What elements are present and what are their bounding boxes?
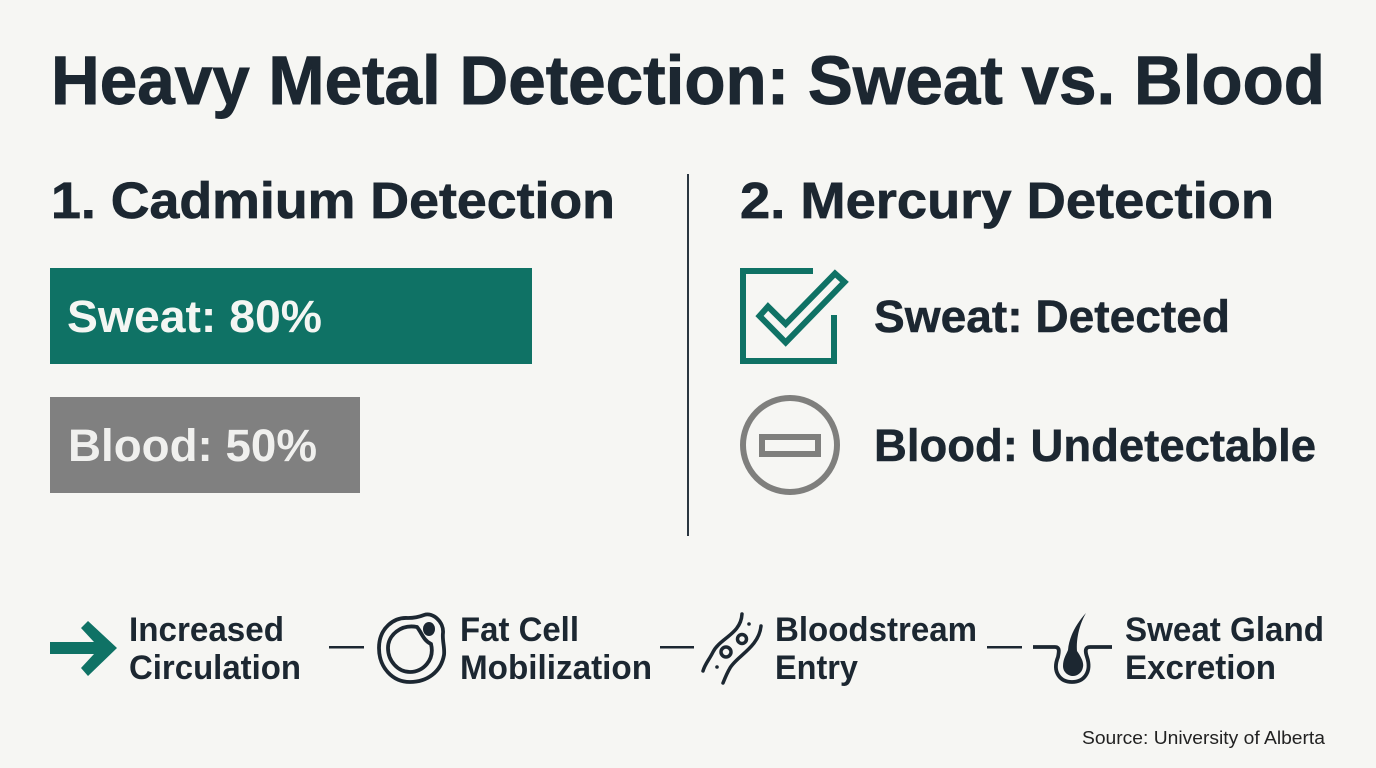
- icon: checkmark in box: [743, 271, 844, 361]
- step label: bloodstream entry: Entry: [775, 649, 858, 687]
- step label: sweat gland excretion: Excretion: [1125, 649, 1276, 687]
- label: sweat detected: Sweat: Detected: [874, 291, 1230, 342]
- title: Heavy Metal Detection: Sweat vs. Blood: [51, 42, 1325, 119]
- bar: blood 50%: [50, 397, 360, 493]
- step label: increased circulation: [129, 611, 301, 687]
- step label: bloodstream entry: Bloodstream: [775, 611, 977, 649]
- panel: mercury detection: [740, 172, 1316, 492]
- icon: minus circle: [743, 398, 837, 492]
- label: blood undetectable: Blood: Undetectable: [874, 420, 1316, 471]
- bar: sweat 80%: Sweat: 80%: [67, 291, 322, 342]
- step label: fat cell mobilization: [460, 611, 652, 687]
- icon: sweat gland: [1033, 613, 1112, 682]
- icon: green arrow: [50, 621, 117, 676]
- step label: sweat gland excretion: [1125, 611, 1324, 687]
- heading: mercury: 2. Mercury Detection: [740, 172, 1274, 229]
- step label: fat cell mobilization: Fat Cell: [460, 611, 579, 649]
- step label: increased circulation: Increased: [129, 611, 284, 649]
- bar: blood 50%: Blood: 50%: [68, 420, 317, 471]
- source note: Source: University of Alberta: [1082, 728, 1326, 748]
- icon: fat cell: [379, 614, 444, 682]
- step label: fat cell mobilization: Mobilization: [460, 649, 652, 687]
- bar: sweat 80%: [50, 268, 532, 364]
- step label: bloodstream entry: [775, 611, 977, 687]
- panel: cadmium detection: [50, 172, 615, 493]
- icon: bloodstream: [703, 614, 761, 683]
- step label: increased circulation: Circulation: [129, 649, 301, 687]
- heading: cadmium: 1. Cadmium Detection: [51, 172, 615, 229]
- panel: process flow: [50, 611, 1324, 687]
- step label: sweat gland excretion: Sweat Gland: [1125, 611, 1324, 649]
